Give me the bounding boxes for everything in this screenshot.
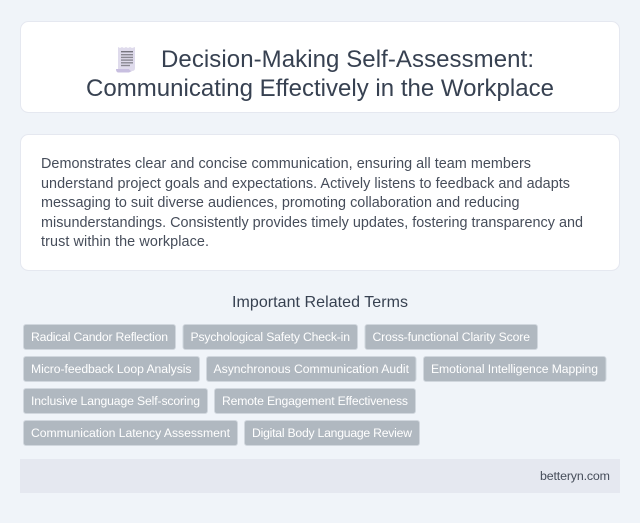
footer bar	[20, 459, 620, 493]
text block: description	[41, 156, 583, 250]
tag: Radical Candor Reflection	[31, 330, 168, 344]
tag: Communication Latency Assessment	[31, 426, 231, 440]
tag	[24, 420, 238, 446]
tag: Cross-functional Clarity Score	[372, 330, 530, 344]
tag	[365, 324, 538, 350]
tag: Asynchronous Communication Audit	[214, 362, 410, 376]
tag: Emotional Intelligence Mapping	[431, 362, 598, 376]
title: Communicating Effectively in the Workplace	[86, 75, 554, 102]
tag	[183, 324, 358, 350]
tag: Remote Engagement Effectiveness	[222, 394, 408, 408]
title: Decision-Making Self-Assessment:	[161, 46, 534, 73]
tag	[24, 324, 176, 350]
heading: important related terms: Important Related Terms	[232, 294, 408, 311]
tag: Psychological Safety Check-in	[190, 330, 350, 344]
tag	[424, 356, 606, 382]
text block: description: misunderstandings. Consistently provides timely updates, fostering transparency and	[41, 215, 583, 231]
title	[86, 46, 554, 102]
text block: description: Demonstrates clear and concise communication, ensuring all team members	[41, 156, 531, 172]
text block: description: trust within the workplace.	[41, 234, 209, 250]
tag: Digital Body Language Review	[252, 426, 412, 440]
icon: document scroll	[116, 47, 135, 72]
text block: description: understand project goals and expectations. Actively listens to feedback and adapts	[41, 176, 570, 192]
footer: site name: betteryn.com	[540, 469, 610, 483]
tag	[244, 420, 420, 446]
text block: description: messaging to suit diverse audiences, promoting collaboration and reducing	[41, 195, 520, 211]
tags: related terms	[24, 324, 606, 446]
panel: description card	[20, 134, 620, 270]
panel: title card	[20, 22, 620, 112]
tag	[24, 356, 200, 382]
tag	[214, 388, 416, 414]
tag: Micro-feedback Loop Analysis	[31, 362, 192, 376]
tag	[206, 356, 416, 382]
tag: Inclusive Language Self-scoring	[31, 394, 200, 408]
tag	[24, 388, 208, 414]
